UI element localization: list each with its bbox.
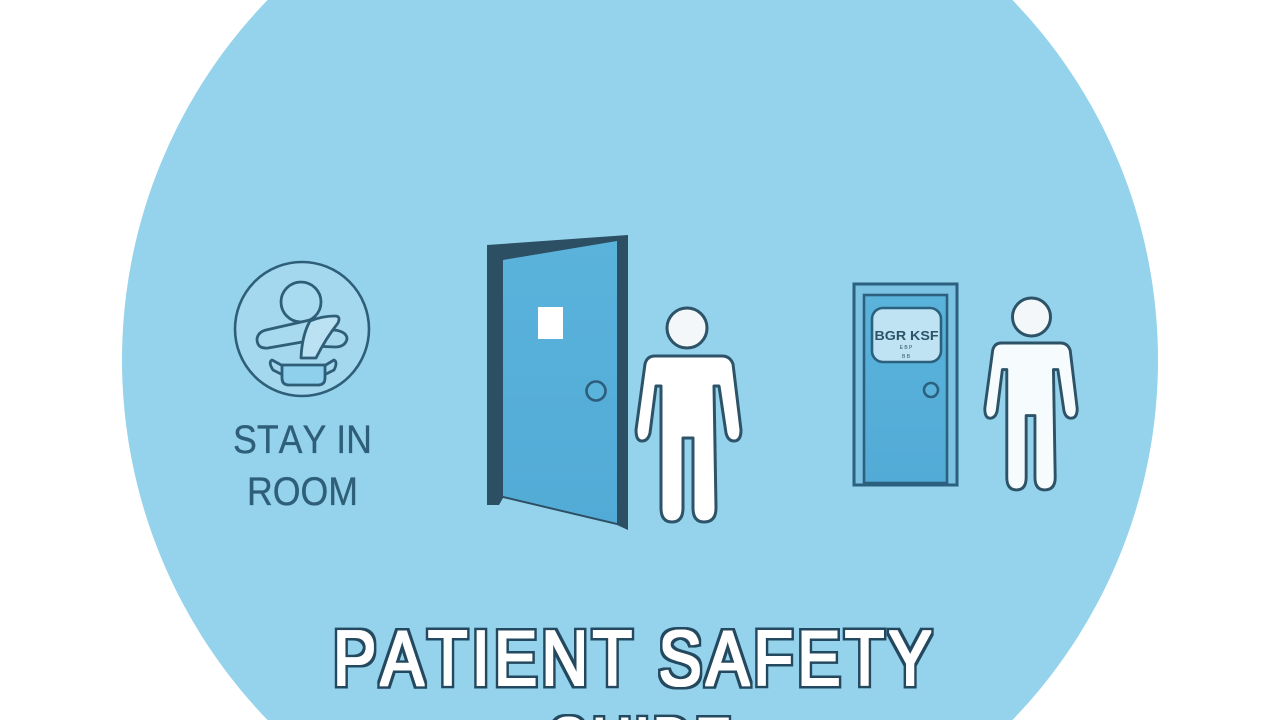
person beside closed door [985,298,1077,490]
title: PATIENT SAFETY [333,614,936,702]
label: stay in room: ROOM [247,470,358,514]
closed door with window sign: B B [902,354,911,360]
open door [487,235,628,530]
label: stay in room [233,418,372,514]
icon: stay in room badge [235,262,369,396]
closed door with window sign: BGR KSF [874,328,939,343]
label: stay in room: STAY IN [233,418,372,462]
closed door with window sign: E B P [900,345,913,351]
person beside open door [636,308,741,522]
closed door with window sign [854,284,957,485]
